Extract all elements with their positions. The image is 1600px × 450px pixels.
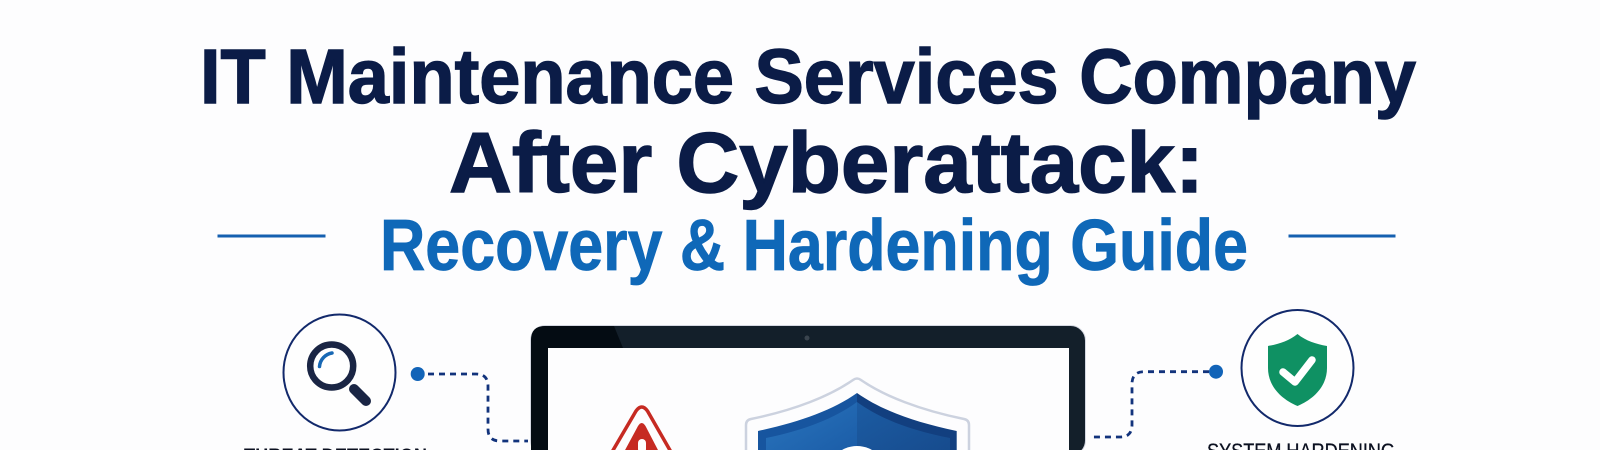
connector: threat detection to laptop xyxy=(411,367,528,441)
subtitle: Recovery & Hardening Guide xyxy=(380,206,1248,286)
icon: central shield xyxy=(746,378,969,450)
title: IT Maintenance Services Company xyxy=(200,34,1416,120)
subtitle rule: right xyxy=(1288,234,1396,238)
title xyxy=(200,34,1416,211)
laptop xyxy=(530,326,1086,450)
title: After Cyberattack: xyxy=(449,116,1204,211)
icon: system hardening shield xyxy=(1242,310,1354,426)
connector: laptop to system hardening xyxy=(1092,365,1223,437)
subtitle rule: left xyxy=(218,234,326,238)
icon: threat detection magnifier xyxy=(284,314,396,430)
icon: warning triangle xyxy=(612,407,671,450)
